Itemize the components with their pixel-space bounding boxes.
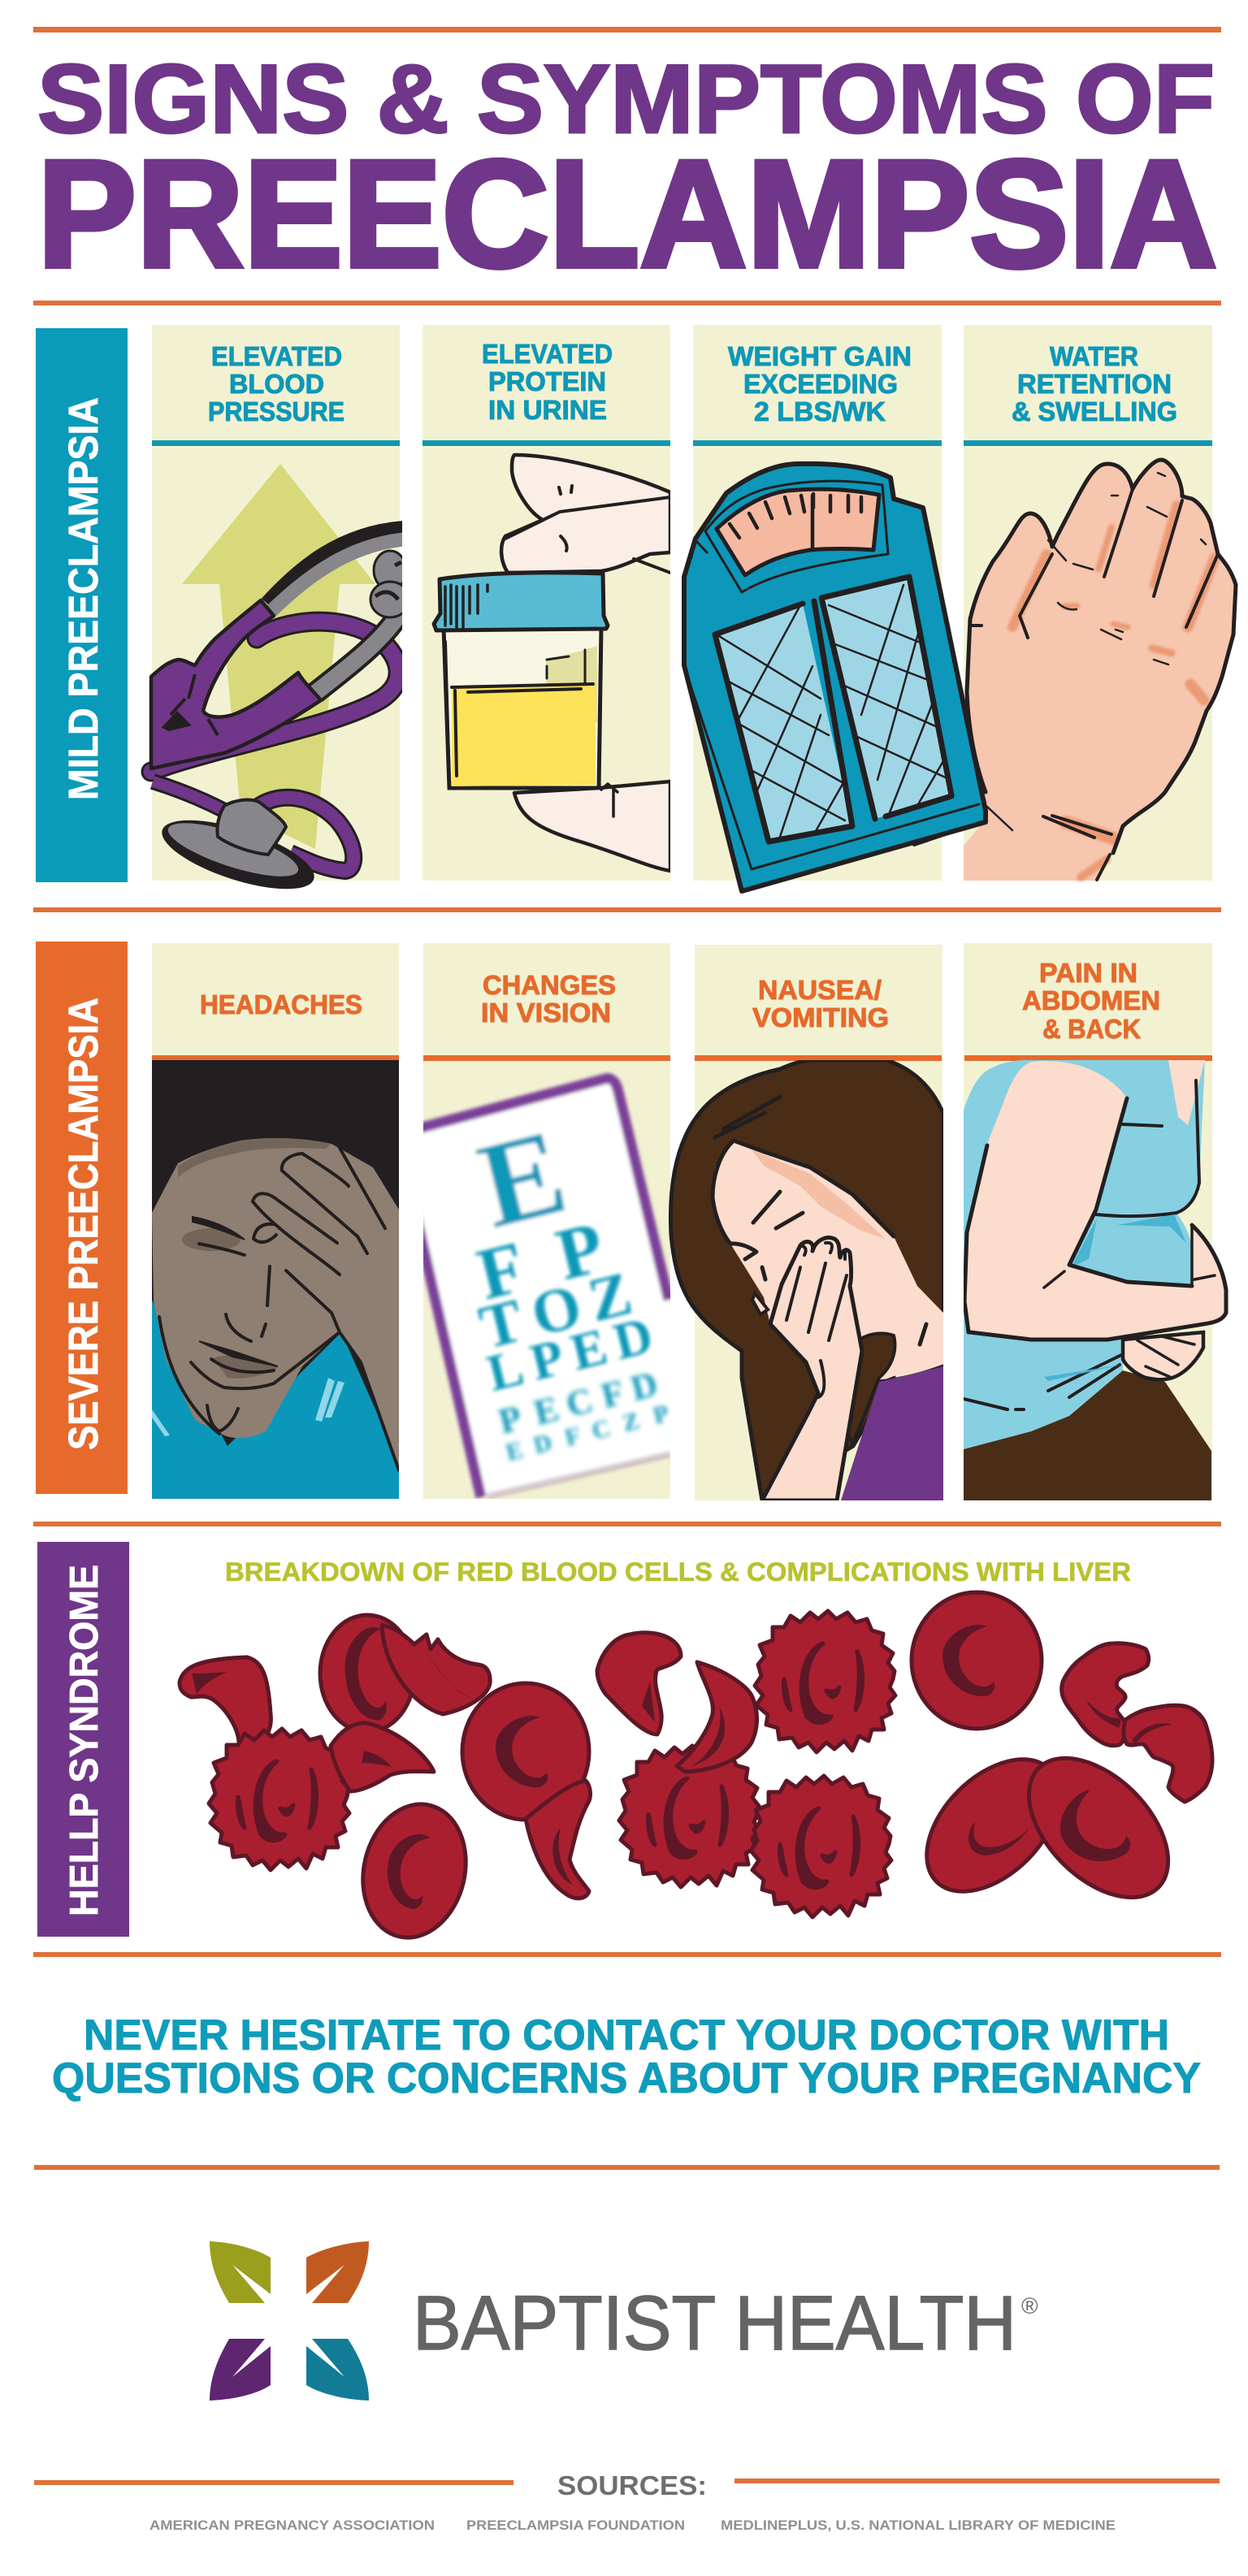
wordmark: BAPTIST HEALTH xyxy=(413,2280,1016,2366)
cell: fragment over burr xyxy=(331,1723,434,1791)
callout: contact your doctor: QUESTIONS OR CONCERNS ABOUT YOUR PREGNANCY xyxy=(52,2054,1201,2102)
cell: toothed crescent xyxy=(382,1625,490,1714)
heading: elevated protein in urine: ELEVATED xyxy=(482,339,613,369)
icon: upward arrow xyxy=(182,464,375,849)
cell: hook right xyxy=(1062,1643,1149,1746)
text: source list: AMERICAN PREGNANCY ASSOCIATION xyxy=(150,2518,435,2533)
text: source list: PREECLAMPSIA FOUNDATION xyxy=(466,2518,685,2533)
cell: oval top centre xyxy=(462,1683,589,1820)
heading: changes in vision: CHANGES xyxy=(483,970,616,1000)
icon: four leaf mark xyxy=(210,2241,369,2401)
heading: nausea vomiting: NAUSEA/ xyxy=(758,975,882,1005)
heading: weight gain xyxy=(728,341,912,426)
heading: elevated blood pressure: ELEVATED xyxy=(211,341,342,371)
heading: weight gain: EXCEEDING xyxy=(743,369,898,399)
title: SIGNS & SYMPTOMS OF xyxy=(37,45,1215,154)
illustration: blurred eye chart: LPED xyxy=(482,1305,658,1402)
icon: urine sample cup held by hand xyxy=(434,455,670,871)
cell markings xyxy=(192,1625,1172,1911)
icon: swollen hand xyxy=(964,460,1236,881)
burr cell top xyxy=(755,1611,895,1752)
heading: pain in abdomen and back: & BACK xyxy=(1042,1014,1141,1044)
cell: oval top right xyxy=(912,1592,1042,1729)
cell: toothed crescent centre xyxy=(526,1781,590,1898)
panel: nausea and vomiting xyxy=(670,945,943,1500)
heading: elevated protein in urine: PROTEIN xyxy=(488,366,606,396)
heading: pain in abdomen and back: ABDOMEN xyxy=(1022,985,1160,1015)
cell: tail right xyxy=(1124,1705,1212,1802)
callout: contact your doctor xyxy=(52,2011,1201,2102)
heading: water retention xyxy=(1012,341,1177,426)
heading: sources: SOURCES: xyxy=(557,2470,707,2500)
band: severe preeclampsia xyxy=(36,942,128,1494)
heading: elevated protein in urine: IN URINE xyxy=(488,395,607,425)
heading: water retention: WATER xyxy=(1050,341,1138,371)
panel: changes in vision xyxy=(423,943,670,1499)
panel: water retention and swelling xyxy=(964,325,1236,881)
illustration: blurred eye chart: PECFD xyxy=(495,1364,661,1442)
cell: pair right xyxy=(1003,1733,1194,1923)
text: source list: MEDLINEPLUS, U.S. NATIONAL LIBRARY OF MEDICINE xyxy=(721,2518,1116,2533)
heading: changes in vision: IN VISION xyxy=(481,998,611,1028)
illustration: woman covering mouth xyxy=(670,1060,943,1500)
icon: stethoscope xyxy=(151,530,410,903)
band: hellp syndrome: HELLP SYNDROME xyxy=(63,1565,106,1916)
heading: pain in abdomen and back xyxy=(1022,958,1160,1044)
cell: hook top left xyxy=(180,1657,271,1747)
heading: weight gain: 2 LBS/WK xyxy=(754,396,886,426)
illustration: blurred eye chart: E xyxy=(466,1103,578,1254)
wordmark: ® xyxy=(1021,2293,1038,2318)
heading: nausea vomiting xyxy=(752,975,889,1033)
heading: elevated blood pressure: PRESSURE xyxy=(208,396,344,426)
cell: sickle centre xyxy=(677,1662,757,1772)
illustration: blurred eye chart: FP xyxy=(470,1207,612,1315)
heading: pain in abdomen and back: PAIN IN xyxy=(1039,958,1138,988)
band: severe preeclampsia: SEVERE PREECLAMPSIA xyxy=(60,998,106,1450)
heading: changes in vision xyxy=(481,970,616,1028)
band: mild preeclampsia: MILD PREECLAMPSIA xyxy=(60,397,106,800)
title xyxy=(37,45,1217,299)
illustration: blurred eye chart xyxy=(423,1071,670,1499)
burr cell left xyxy=(209,1729,349,1870)
panel: elevated protein in urine xyxy=(422,325,670,881)
cell: pair left xyxy=(902,1734,1084,1916)
cell: hook centre xyxy=(597,1633,681,1734)
heading: nausea vomiting: VOMITING xyxy=(752,1002,889,1033)
band: hellp syndrome xyxy=(37,1542,129,1937)
panel: headaches xyxy=(152,943,399,1499)
illustration: pregnant woman holding belly xyxy=(964,1060,1226,1500)
icon: bathroom scale xyxy=(684,464,986,891)
logo: baptist health xyxy=(210,2241,1038,2401)
callout: contact your doctor: NEVER HESITATE TO CONTACT YOUR DOCTOR WITH xyxy=(84,2011,1169,2059)
illustration: man holding head xyxy=(152,1060,399,1499)
cell: oval lower left xyxy=(350,1794,479,1948)
title: PREECLAMPSIA xyxy=(37,128,1217,299)
panel: weight gain exceeding 2 lbs per week xyxy=(693,325,942,881)
cell: overlapping disc xyxy=(320,1615,414,1732)
illustration: damaged red blood cells xyxy=(180,1592,1212,1948)
heading: elevated blood pressure xyxy=(208,341,344,426)
burr cell bottom xyxy=(751,1776,891,1917)
panel: pain in abdomen and back xyxy=(964,943,1226,1500)
band: mild preeclampsia xyxy=(36,328,128,882)
text: source list xyxy=(150,2518,1116,2533)
heading: breakdown of red blood cells: BREAKDOWN OF RED BLOOD CELLS & COMPLICATIONS WITH LIVER xyxy=(225,1557,1131,1587)
heading: elevated protein in urine xyxy=(482,339,613,425)
heading: water retention: RETENTION xyxy=(1017,369,1172,399)
burr cell centre xyxy=(619,1746,760,1887)
heading: headaches: HEADACHES xyxy=(200,989,362,1020)
illustration: blurred eye chart: TOZ xyxy=(473,1259,639,1362)
illustration: blurred eye chart: EDFCZP xyxy=(503,1400,671,1466)
heading: weight gain: WEIGHT GAIN xyxy=(728,341,912,371)
heading: water retention: & SWELLING xyxy=(1012,396,1177,426)
heading: elevated blood pressure: BLOOD xyxy=(229,369,324,399)
panel: elevated blood pressure xyxy=(151,325,410,903)
